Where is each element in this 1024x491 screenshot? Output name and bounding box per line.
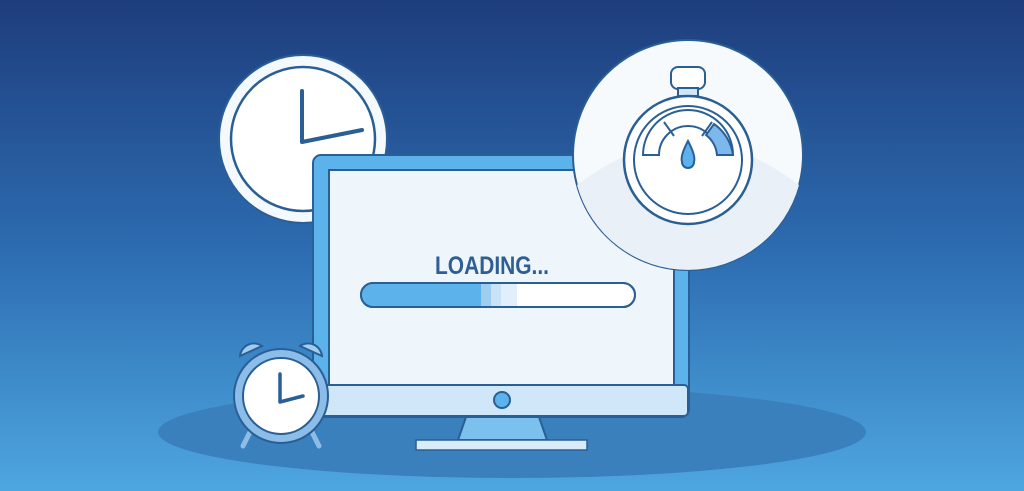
icon: wall clock [219, 55, 387, 223]
progress bar [361, 283, 635, 307]
icon: alarm clock [234, 343, 328, 446]
icon: stopwatch circle [573, 40, 803, 270]
loading text: LOADING... [435, 252, 549, 280]
floor ellipse [158, 386, 866, 478]
stand [458, 417, 547, 440]
monitor button [494, 392, 510, 408]
monitor [313, 155, 689, 450]
